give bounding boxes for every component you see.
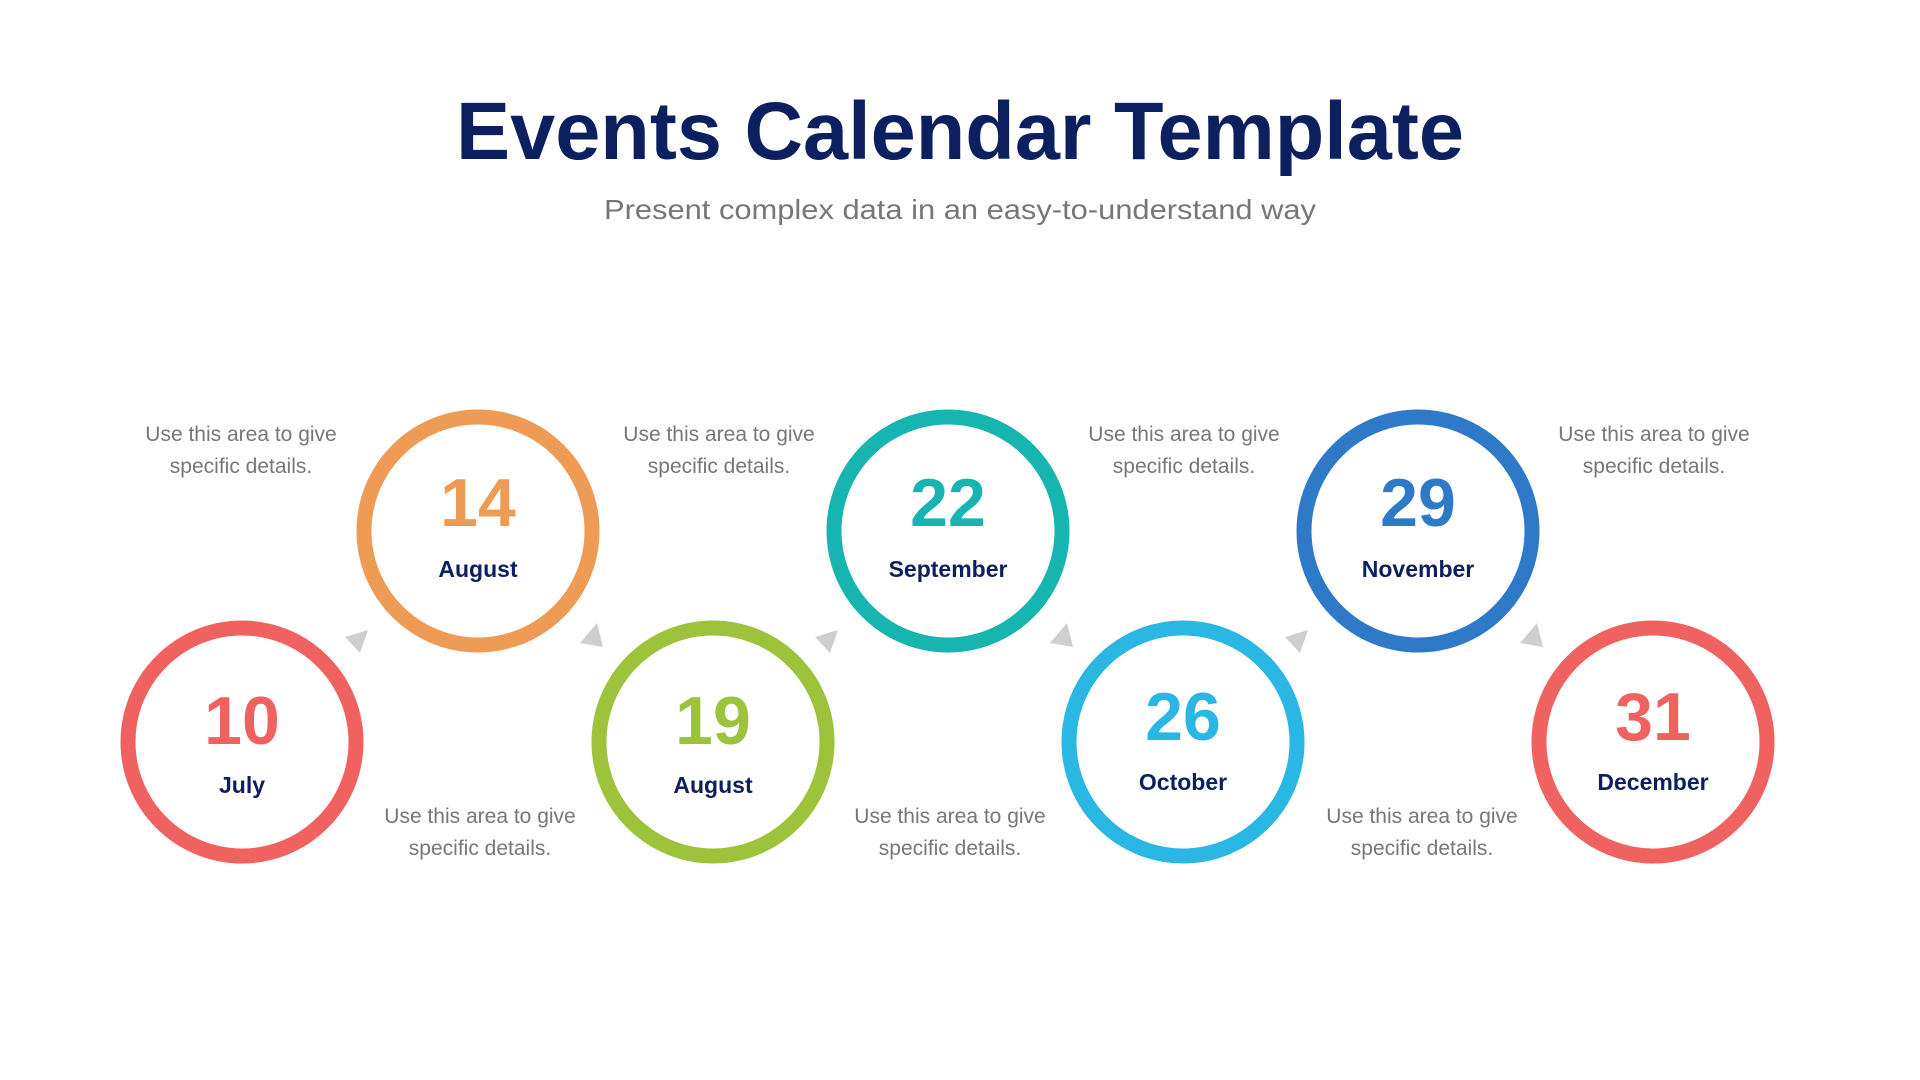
event: 26 October: October [1139,769,1227,795]
detail texts: Use this area to give [145,423,337,446]
detail texts: specific details. [1583,455,1725,478]
detail texts: specific details. [648,455,790,478]
event: 29 November: 29 [1380,465,1456,541]
event: 10 July: July [219,772,265,798]
detail texts [145,423,1750,860]
detail texts: specific details. [170,455,312,478]
event: 19 August [599,628,827,856]
detail texts: specific details. [1113,455,1255,478]
subtitle: Present complex data in an easy-to-understand way [604,194,1316,225]
event: 22 September: 22 [910,465,986,541]
event: 31 December [1539,628,1767,856]
event: 31 December: December [1597,769,1709,795]
event: 10 July [128,628,356,856]
event: 31 December: 31 [1615,679,1691,755]
detail texts: specific details. [879,837,1021,860]
title: Events Calendar Template [456,86,1464,177]
event: 22 September [834,417,1062,645]
detail texts: Use this area to give [1558,423,1750,446]
event: 10 July: 10 [204,683,280,759]
event: 22 September: September [889,556,1007,582]
event: 14 August: August [438,556,518,582]
event: 29 November: November [1362,556,1474,582]
event: 19 August: August [673,772,753,798]
arrows between events [345,623,1543,653]
detail texts: Use this area to give [1326,805,1518,828]
event: 14 August: 14 [440,465,516,541]
event: 26 October [1069,628,1297,856]
event: 14 August [364,417,592,645]
event: 26 October: 26 [1145,679,1221,755]
detail texts: Use this area to give [854,805,1046,828]
detail texts: Use this area to give [384,805,576,828]
detail texts: Use this area to give [1088,423,1280,446]
event: 19 August: 19 [675,683,751,759]
detail texts: Use this area to give [623,423,815,446]
detail texts: specific details. [409,837,551,860]
event: 29 November [1304,417,1532,645]
detail texts: specific details. [1351,837,1493,860]
